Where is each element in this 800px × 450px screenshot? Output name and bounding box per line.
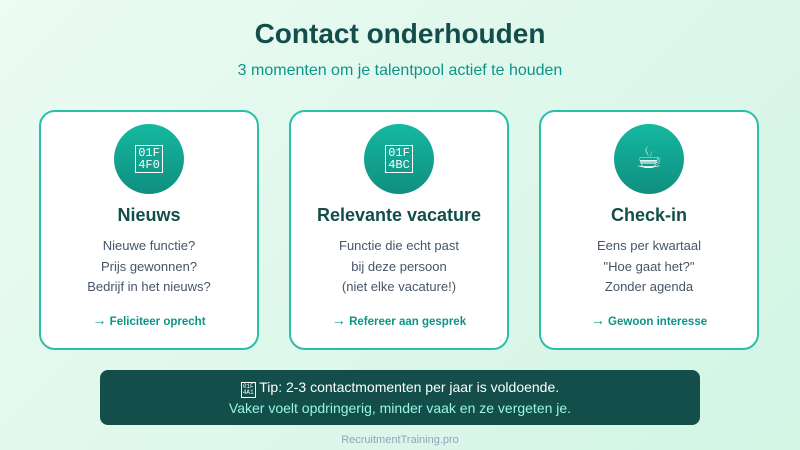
icon: briefcase: 4BC [388, 158, 410, 172]
icon: newspaper: 01F [138, 146, 160, 160]
action: nieuws: → Feliciteer oprecht [92, 312, 206, 328]
text: vacature [339, 238, 459, 294]
text: check-in [597, 238, 701, 294]
action: check-in: → Gewoon interesse [591, 312, 707, 328]
icon: briefcase: 01F [388, 146, 410, 160]
title: Contact onderhouden [255, 18, 545, 49]
icon: coffee: ☕ [636, 141, 662, 176]
text: check-in: Zonder agenda [605, 279, 693, 294]
text: check-in: "Hoe gaat het?" [604, 258, 694, 274]
heading: nieuws: Nieuws [117, 205, 181, 225]
text: nieuws: Nieuwe functie? [103, 238, 195, 253]
text: check-in: Eens per kwartaal [597, 238, 701, 253]
action: vacature: → Refereer aan gesprek [332, 312, 466, 328]
text: nieuws [87, 238, 211, 294]
panel: check-in [539, 110, 759, 350]
panel: nieuws [39, 110, 259, 350]
text: vacature: bij deze persoon [351, 258, 447, 274]
callout: tip: Tip: 2-3 contactmomenten per jaar is voldoende. [259, 379, 559, 395]
icon: newspaper [114, 124, 184, 194]
text: vacature: Functie die echt past [339, 238, 459, 253]
icon: coffee [614, 124, 684, 194]
footer: RecruitmentTraining.pro [341, 434, 459, 446]
text: vacature: (niet elke vacature!) [342, 279, 456, 294]
heading: check-in: Check-in [611, 205, 687, 225]
panel: vacature [289, 110, 509, 350]
callout: tip: 4A1 [243, 389, 254, 396]
icon: briefcase [364, 124, 434, 194]
heading: vacature: Relevante vacature [317, 205, 481, 225]
text: nieuws: Prijs gewonnen? [101, 258, 197, 274]
callout: tip [100, 370, 700, 425]
text: nieuws: Bedrijf in het nieuws? [87, 279, 211, 294]
callout: tip: 01F [243, 383, 254, 390]
icon: newspaper: 4F0 [138, 158, 160, 172]
callout: tip: Vaker voelt opdringerig, minder vaak en ze vergeten je. [229, 400, 571, 416]
subtitle: 3 momenten om je talentpool actief te houden [238, 62, 562, 79]
